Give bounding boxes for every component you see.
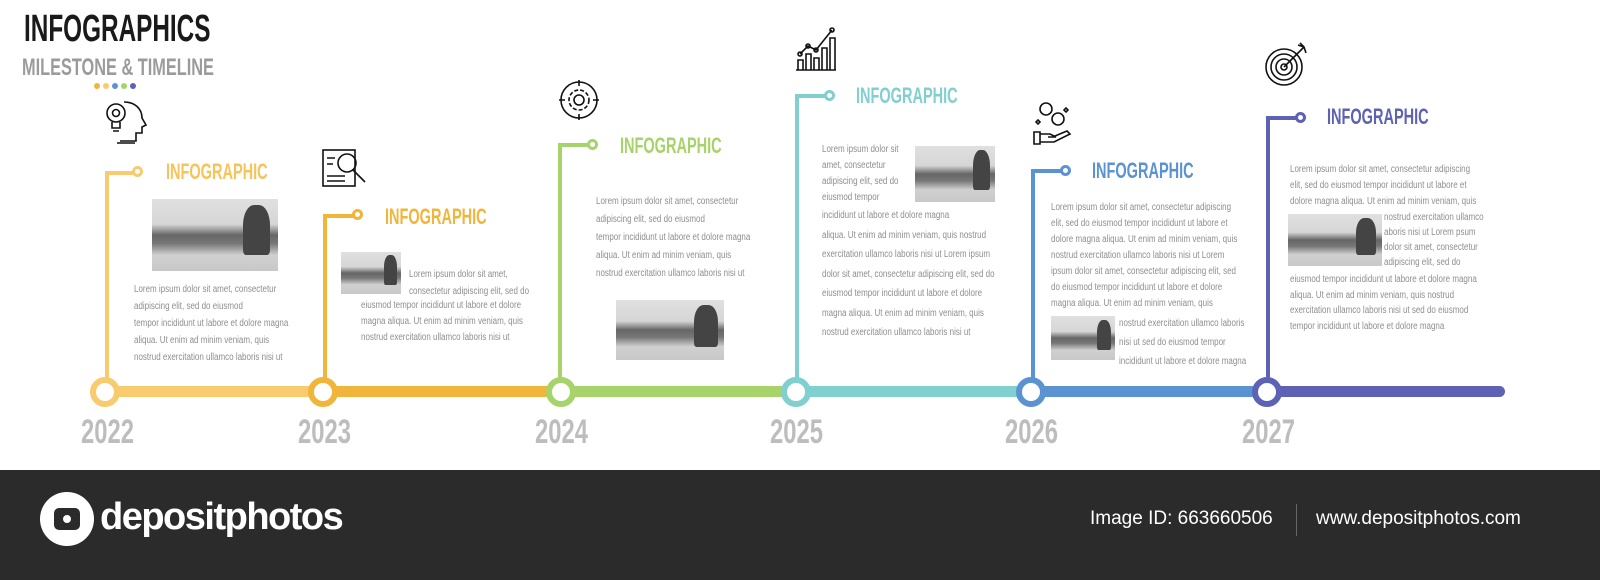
icon: idea head (106, 101, 148, 144)
milestone 2025: adipiscing elit, sed do (822, 176, 898, 187)
milestone 2024: Lorem ipsum dolor sit amet, consectetur (596, 196, 738, 207)
milestone 2022: adipiscing elit, sed do eiusmod (134, 301, 243, 312)
title (22, 8, 214, 89)
milestone 2027: Lorem ipsum dolor sit amet, consectetur adipiscing (1290, 164, 1470, 175)
milestone 2026: do eiusmod tempor incididunt ut labore et dolore (1051, 282, 1222, 293)
milestone 2026: nostrud exercitation ullamco laboris nisi ut Lorem (1051, 250, 1224, 261)
milestone 2023: 2023 (298, 413, 351, 451)
milestone 2027: dolore magna aliqua. Ut enim ad minim veniam, quis (1290, 196, 1476, 207)
milestone 2025: dolor sit amet, consectetur adipiscing elit, sed do (822, 268, 995, 280)
website: www.depositphotos.com (1316, 508, 1521, 529)
milestone 2027: dolor sit amet, consectetur (1384, 242, 1478, 253)
milestone 2025: eiusmod tempor incididunt ut labore et dolore (822, 288, 982, 299)
milestone 2026: nisi ut sed do eiusmod tempor (1119, 337, 1226, 348)
milestone 2025: aliqua. Ut enim ad minim veniam, quis nostrud (822, 230, 986, 240)
milestone 2024: adipiscing elit, sed do eiusmod (596, 214, 705, 225)
heading: INFOGRAPHIC (385, 204, 487, 229)
icon: chart (796, 27, 836, 71)
milestone 2026 (1005, 102, 1246, 451)
milestone 2022: nostrud exercitation ullamco laboris nisi ut (134, 352, 283, 363)
milestone 2026: incididunt ut labore et dolore magna (1119, 356, 1246, 367)
milestone 2024 (535, 80, 750, 451)
milestone 2027: 2027 (1242, 413, 1295, 451)
milestone 2024: tempor incididunt ut labore et dolore magna (596, 232, 750, 243)
milestone 2023 (298, 149, 529, 451)
milestone 2027: exercitation ullamco laboris nisi ut sed do eiusmod (1290, 305, 1468, 316)
milestone 2025: 2025 (770, 413, 823, 451)
milestone 2027 (1242, 42, 1484, 451)
icon: target (1265, 42, 1307, 86)
icon: money hand (1033, 102, 1072, 145)
heading: INFOGRAPHIC (166, 159, 268, 184)
milestone 2022: Lorem ipsum dolor sit amet, consectetur (134, 284, 276, 295)
milestone 2025: incididunt ut labore et dolore magna (822, 210, 949, 221)
heading: INFOGRAPHIC (620, 133, 722, 158)
milestone 2025: nostrud exercitation ullamco laboris nisi ut (822, 327, 971, 338)
milestone 2023: consectetur adipiscing elit, sed do (409, 286, 529, 297)
title: INFOGRAPHICS (24, 8, 210, 50)
milestone 2026: nostrud exercitation ullamco laboris (1119, 318, 1244, 329)
milestone 2025: magna aliqua. Ut enim ad minim veniam, quis (822, 308, 984, 318)
milestone 2022 (81, 101, 288, 451)
milestone 2025: exercitation ullamco laboris nisi ut Lorem ipsum (822, 249, 990, 260)
footer bar (0, 470, 1600, 580)
milestone 2026: magna aliqua. Ut enim ad minim veniam, quis (1051, 298, 1213, 309)
milestone 2023: magna aliqua. Ut enim ad minim veniam, quis (361, 316, 523, 327)
milestone 2022: aliqua. Ut enim ad minim veniam, quis (134, 335, 269, 346)
image id: Image ID: 663660506 (1090, 508, 1273, 529)
milestone 2025: eiusmod tempor (822, 192, 879, 203)
milestone 2027: adipiscing elit, sed do (1384, 257, 1460, 268)
milestone 2022: tempor incididunt ut labore et dolore magna (134, 318, 288, 329)
milestone 2025: Lorem ipsum dolor sit (822, 144, 898, 155)
logo: depositphotos (100, 496, 342, 538)
logo (40, 492, 342, 546)
milestone 2027: eiusmod tempor incididunt ut labore et dolore magna (1290, 274, 1477, 285)
milestone 2023: eiusmod tempor incididunt ut labore et dolore (361, 300, 521, 311)
milestone 2026: 2026 (1005, 413, 1058, 451)
milestone 2027: tempor incididunt ut labore et dolore magna (1290, 320, 1444, 332)
milestone 2026: elit, sed do eiusmod tempor incididunt ut labore et (1051, 218, 1228, 229)
icon: document search (322, 149, 366, 187)
milestone 2024: 2024 (535, 413, 588, 451)
milestone 2027: aliqua. Ut enim ad minim veniam, quis nostrud (1290, 290, 1454, 300)
milestone 2023: nostrud exercitation ullamco laboris nisi ut (361, 332, 510, 343)
milestone 2022: 2022 (81, 413, 134, 451)
timeline bar (118, 386, 1505, 397)
milestone 2025: amet, consectetur (822, 160, 886, 171)
milestone 2026: ipsum dolor sit amet, consectetur adipiscing elit, sed (1051, 266, 1236, 277)
milestone 2024: nostrud exercitation ullamco laboris nisi ut (596, 268, 745, 279)
title: MILESTONE & TIMELINE (22, 54, 214, 81)
milestone 2027: elit, sed do eiusmod tempor incididunt ut labore et (1290, 180, 1467, 191)
heading: INFOGRAPHIC (1327, 104, 1429, 129)
milestone 2026: dolore magna aliqua. Ut enim ad minim veniam, quis (1051, 234, 1237, 245)
milestone 2025 (770, 27, 995, 451)
heading: INFOGRAPHIC (1092, 158, 1194, 183)
milestone 2024: aliqua. Ut enim ad minim veniam, quis (596, 250, 731, 261)
milestone 2027: nostrud exercitation ullamco (1384, 212, 1484, 223)
heading: INFOGRAPHIC (856, 83, 958, 108)
milestone 2026: Lorem ipsum dolor sit amet, consectetur adipiscing (1051, 202, 1231, 213)
icon: gear target (559, 80, 599, 120)
milestone 2023: Lorem ipsum dolor sit amet, (409, 269, 508, 280)
milestone 2027: aboris nisi ut Lorem psum (1384, 227, 1476, 238)
